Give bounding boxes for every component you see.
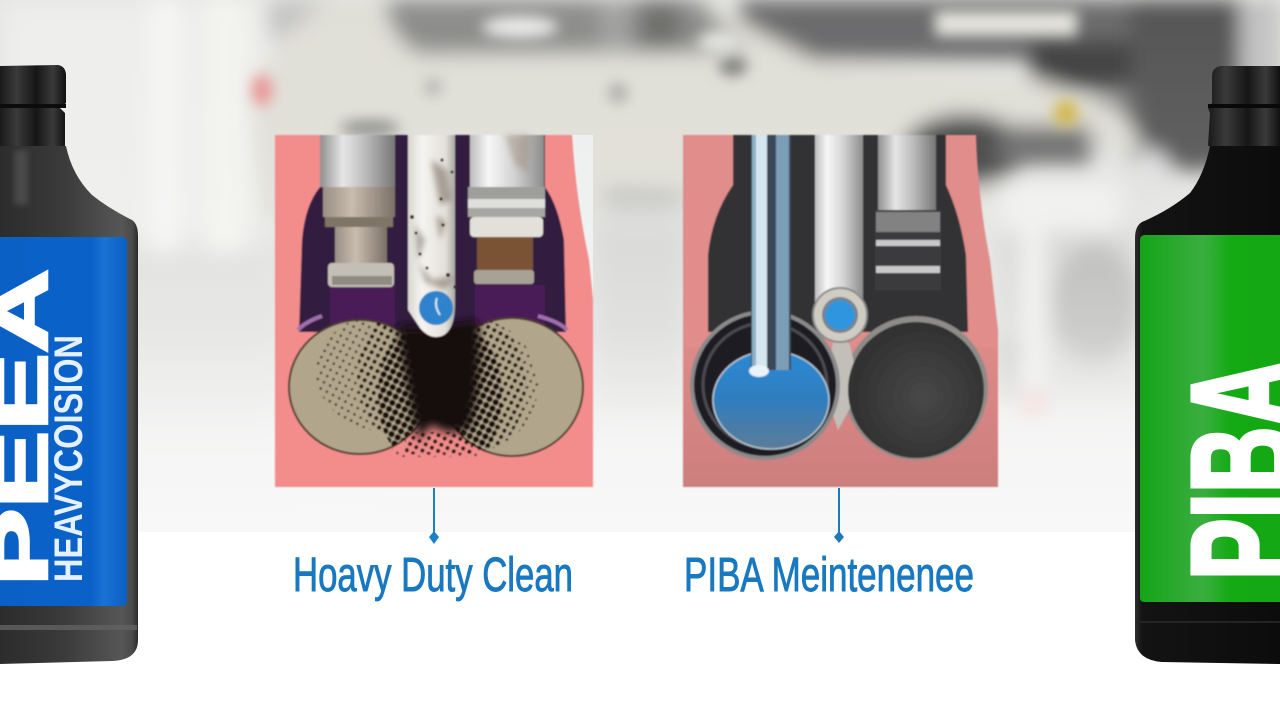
right injector [468,135,545,284]
engine cavity [299,135,566,332]
caption: heavy duty clean: Hoavy Duty Clean [293,549,573,602]
far wall and shadows [270,0,330,38]
panel background [683,135,998,487]
clean blue valve [692,312,838,458]
bottle base ridge [0,625,137,630]
engine cavity [708,135,968,332]
right dirty valve [441,318,583,456]
clean dark valve [848,322,984,458]
carbon deposit [316,309,538,457]
wheel arch [903,114,1027,186]
light pillars [150,0,180,250]
car window [385,0,745,54]
centre injector [813,135,867,342]
bottle base ridge [1137,621,1280,623]
label subtext: HEAVYCOISION [47,335,91,582]
silver valve surround [825,316,988,460]
panel background [275,135,593,487]
bottle body [1135,146,1280,664]
caption: PIBA maintenance: PIBA Meintenenee [684,549,974,602]
left injector [320,135,395,287]
blue label [0,237,127,606]
bottle body [0,146,138,664]
centre clogged injector [408,135,457,337]
car body [252,0,1145,220]
left bottle: PEA [0,65,138,664]
valve seat highlights [298,316,567,330]
right injector [875,135,941,290]
bottle cap [0,65,66,146]
bottle cap [1208,66,1280,146]
blue spray injector [749,135,791,377]
panel: heavy duty clean [275,135,593,487]
green label [1140,235,1280,602]
connector arrow: heavy duty clean [429,488,439,544]
blue ball [419,291,453,325]
connector arrow: PIBA maintenance [834,488,844,543]
bottle neck highlight [14,150,28,205]
panel: PIBA maintenance [683,135,998,487]
bright edge beside panels [572,135,593,300]
left dirty valve [289,320,431,454]
right bottle: PIBA [1135,66,1280,664]
